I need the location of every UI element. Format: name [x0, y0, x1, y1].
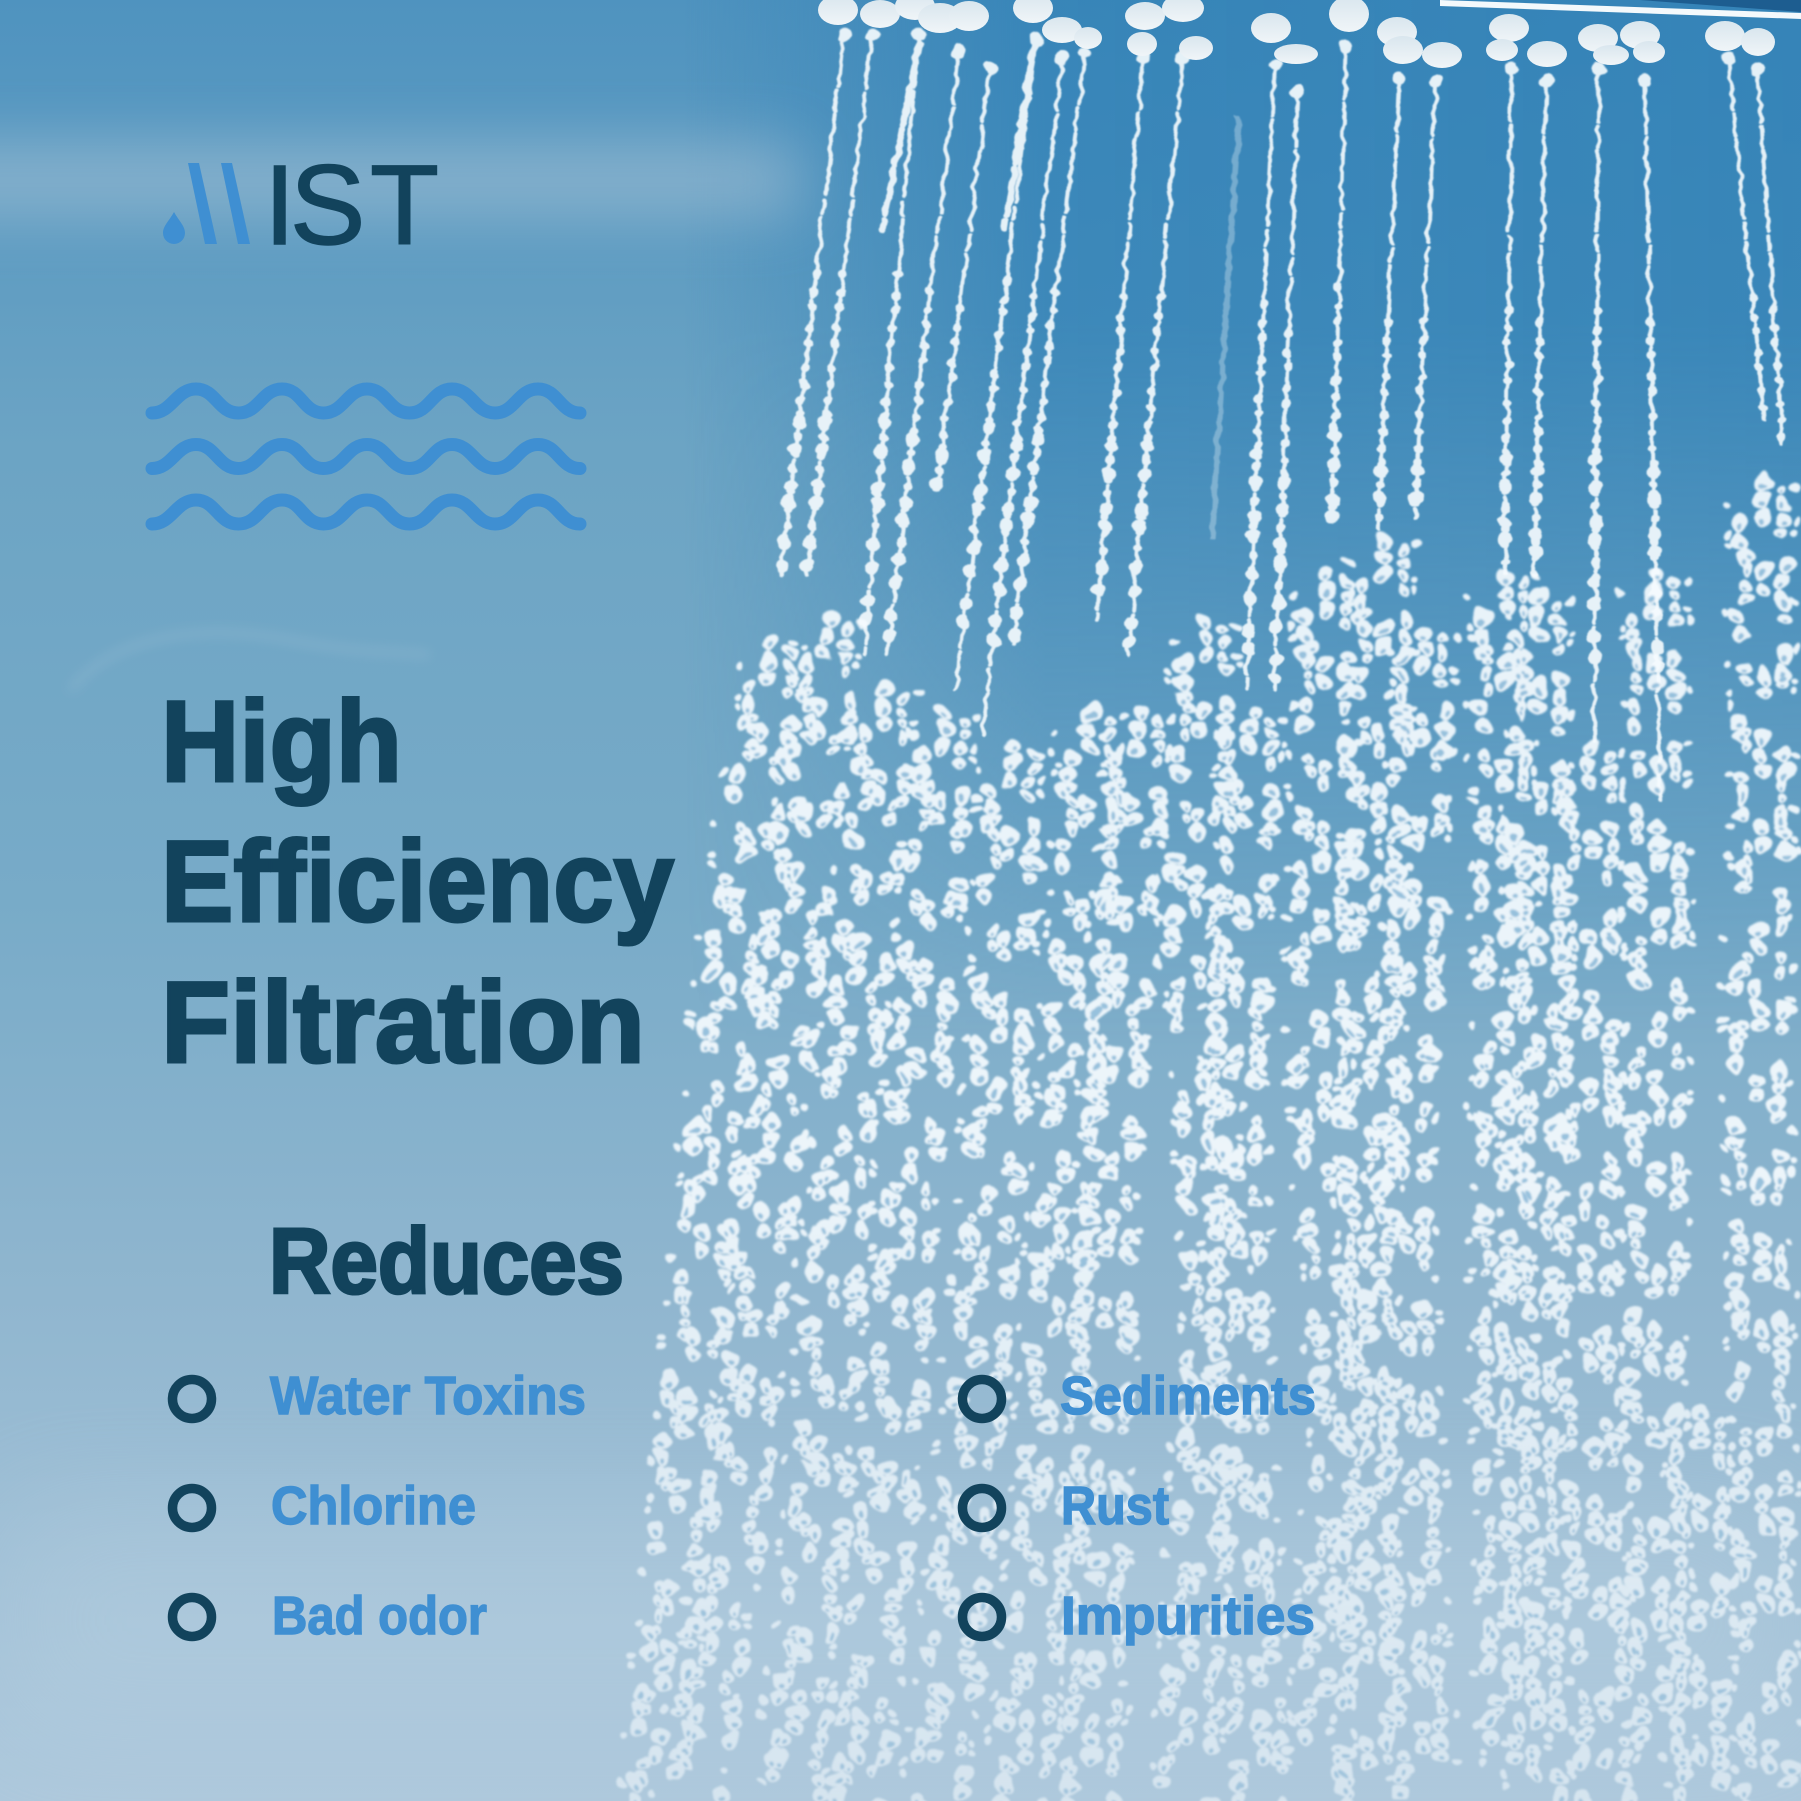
- shower head nozzles: [818, 0, 1801, 68]
- list: left column: [172, 1366, 586, 1646]
- item: Chlorine: [172, 1476, 476, 1536]
- heading: High Efficiency Filtration: [161, 678, 674, 1087]
- item: Bad odor: [172, 1586, 487, 1646]
- item: Water Toxins: Water Toxins: [270, 1366, 586, 1426]
- item: Chlorine: Chlorine: [271, 1476, 476, 1536]
- icon: three waves: [152, 389, 580, 524]
- heading: High Efficiency Filtration: Efficiency: [161, 818, 674, 946]
- item: Sediments: Sediments: [1060, 1366, 1316, 1426]
- icon: water drop and slanted bars: [163, 163, 250, 244]
- list: right column: [962, 1366, 1316, 1646]
- heading: High Efficiency Filtration: Filtration: [161, 959, 645, 1087]
- item: Sediments: [962, 1366, 1316, 1426]
- item: Impurities: Impurities: [1061, 1586, 1315, 1646]
- photo: shower water: [620, 0, 1801, 1801]
- item: Bad odor: Bad odor: [272, 1586, 487, 1646]
- logo text: IST: [264, 142, 439, 268]
- item: Rust: [962, 1476, 1169, 1536]
- water droplets: [620, 482, 1801, 1801]
- water streams: [781, 34, 1783, 804]
- heading: High Efficiency Filtration: High: [161, 678, 402, 806]
- subheading: Reduces: Reduces: [269, 1209, 624, 1313]
- item: Rust: Rust: [1061, 1476, 1169, 1536]
- logo: MIST: [163, 142, 439, 268]
